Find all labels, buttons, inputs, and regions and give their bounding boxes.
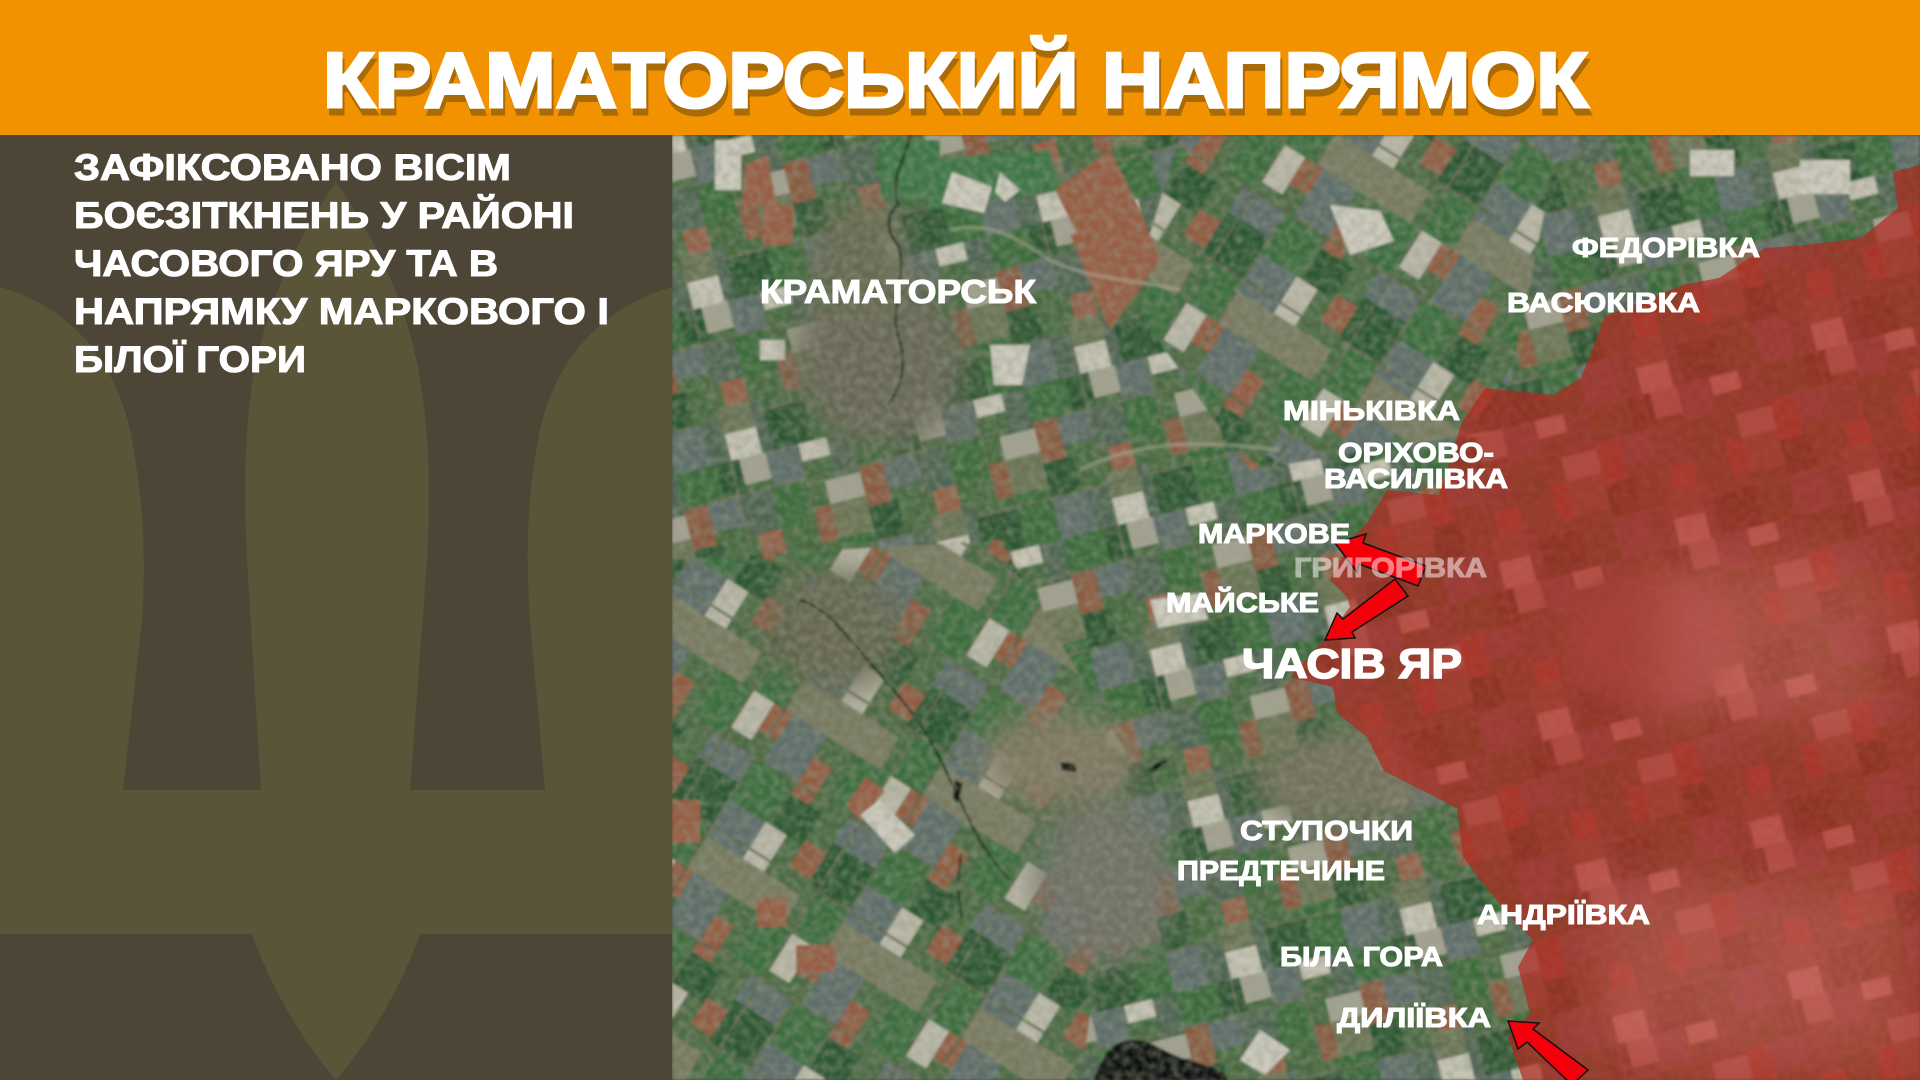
map place labels: СТУПОЧКИ <box>1240 815 1413 846</box>
map place labels: КРАМАТОРСЬК <box>760 273 1037 310</box>
map place labels: ВАСЮКІВКА <box>1507 287 1700 318</box>
arrow: advance towards Dyliivka <box>1508 1021 1588 1080</box>
title: КРАМАТОРСЬКИЙ НАПРЯМОК <box>323 36 1588 124</box>
text block: summary: ЧАСОВОГО ЯРУ ТА В <box>74 243 498 284</box>
map place labels: ФЕДОРІВКА <box>1572 232 1760 263</box>
map place labels: МАЙСЬКЕ <box>1166 586 1319 618</box>
text block: summary: БІЛОЇ ГОРИ <box>74 339 306 380</box>
text block: summary: НАПРЯМКУ МАРКОВОГО І <box>74 291 609 332</box>
rivers and ponds <box>800 135 1010 918</box>
arrow: advance towards Chasiv Yar <box>1325 579 1408 640</box>
map place labels: ПРЕДТЕЧИНЕ <box>1177 855 1385 886</box>
text block: summary: ЗАФІКСОВАНО ВІСІМ <box>74 147 511 188</box>
panel: left information panel <box>0 135 672 1080</box>
header bar <box>0 0 1920 135</box>
map place labels: ЧАСІВ ЯР <box>1242 640 1462 687</box>
text block: summary: БОЄЗІТКНЕНЬ У РАЙОНІ <box>74 194 574 236</box>
text block: summary <box>74 147 609 380</box>
arrow: advance towards Markove <box>1335 534 1426 586</box>
map place labels: ДИЛІЇВКА <box>1337 1002 1491 1033</box>
occupied territory overlay <box>1290 165 1920 1080</box>
map place labels: ВАСИЛІВКА <box>1324 463 1508 494</box>
map place labels: АНДРІЇВКА <box>1477 899 1650 930</box>
map: satellite view of the Kramatorsk direction <box>672 135 1920 1080</box>
map place labels: ОРІХОВО- <box>1338 437 1494 468</box>
icon: trident emblem watermark <box>0 182 672 1080</box>
map place labels: МАРКОВЕ <box>1198 518 1350 549</box>
map place labels: МІНЬКІВКА <box>1283 395 1460 426</box>
specific fields <box>672 140 1850 1075</box>
map place labels <box>760 232 1760 1033</box>
map place labels: БІЛА ГОРА <box>1280 941 1443 972</box>
urban areas <box>765 200 1740 965</box>
map place labels: ГРИГОРІВКА <box>1294 552 1487 583</box>
